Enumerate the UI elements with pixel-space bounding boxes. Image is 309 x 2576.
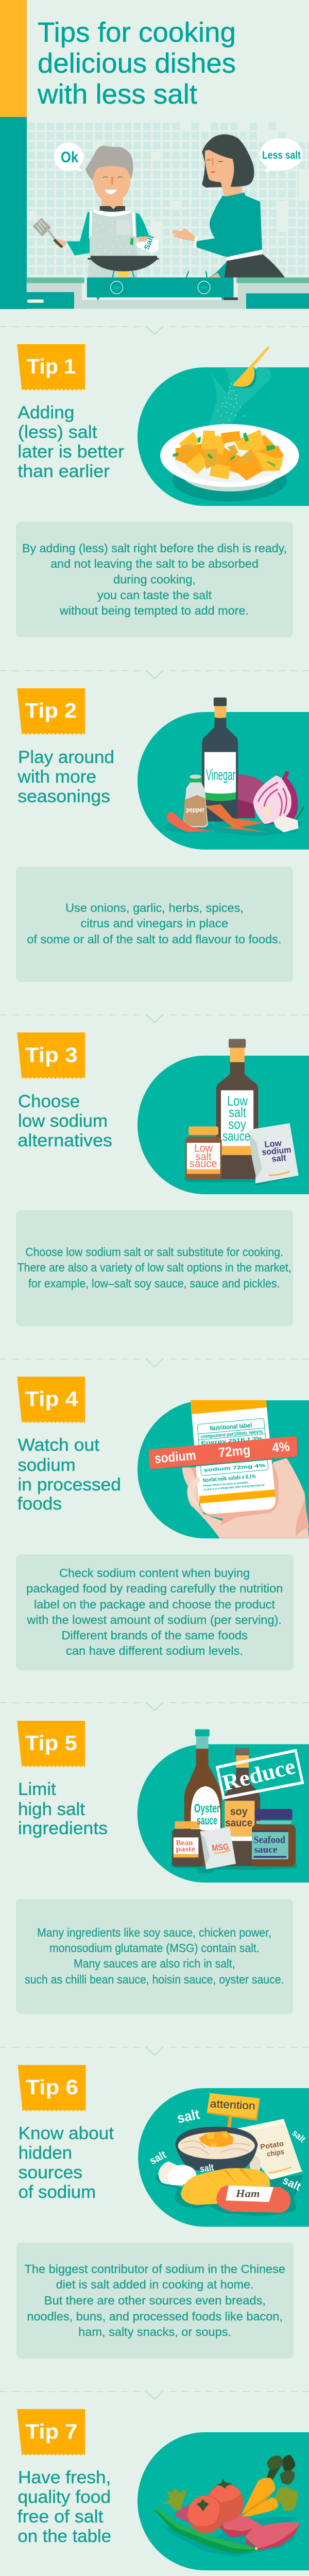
reduce stamp text: Reduce — [220, 1753, 298, 1796]
heading: low sodium — [18, 1111, 108, 1131]
speech bubble: Less salt: Less salt — [262, 149, 301, 161]
soy sauce label text: sauce — [222, 1128, 250, 1144]
heading: seasonings — [18, 787, 110, 806]
nutrition label text — [200, 1421, 266, 1492]
illustration: fresh vegetables — [153, 2455, 300, 2556]
teal pill background — [138, 2432, 309, 2570]
text panel: But there are other sources even breads, — [44, 2294, 266, 2307]
tip badge — [17, 1721, 85, 1767]
tip badge: Tip 4 — [25, 1387, 78, 1411]
bottle and jar label text: soy — [230, 1806, 248, 1818]
text panel: By adding (less) salt right before the dish is ready, — [22, 541, 287, 555]
text panel: packaged food by reading carefully the nutrition — [26, 1582, 283, 1595]
arrow: divider 5 — [0, 1702, 309, 1710]
heading: on the table — [18, 2527, 111, 2546]
jar label text: sauce — [190, 1158, 217, 1170]
tip badge: Tip 5 — [25, 1731, 77, 1755]
text panel — [16, 1210, 293, 1326]
heading: of sodium — [19, 2182, 96, 2202]
sign and food labels text — [148, 2098, 307, 2200]
heading: high salt — [18, 1800, 85, 1819]
text panel: ham, salty snacks, or soups. — [78, 2325, 231, 2338]
illustration: hand holding label — [182, 1400, 309, 1538]
bottle and jar label text — [176, 1802, 285, 1855]
sign and food labels text: salt — [176, 2106, 201, 2126]
pepper label text: pepper — [186, 806, 204, 814]
stove — [87, 278, 233, 301]
heading: Know about — [19, 2124, 114, 2143]
panel: tip 7 — [16, 2409, 309, 2576]
heading: Have fresh, — [18, 2468, 111, 2487]
heading: quality food — [18, 2487, 111, 2507]
speech bubble: Ok — [54, 143, 83, 171]
panel: tip 2 — [16, 688, 309, 982]
bag label text — [262, 1138, 291, 1164]
left colour bar — [0, 0, 27, 309]
bottle and jar label text: Bean — [176, 1839, 193, 1848]
heading: ingredients — [18, 1819, 108, 1838]
red sodium highlight bar — [149, 1436, 299, 1470]
heading: sodium — [18, 1455, 76, 1475]
red sodium highlight bar: 72mg — [218, 1442, 251, 1460]
nutrition label text: component per100ml. NRV% — [200, 1429, 263, 1440]
bag label text: salt — [271, 1153, 287, 1164]
text panel: Many sauces are also rich in salt, — [74, 1957, 235, 1970]
text panel: and not leaving the salt to be absorbed — [50, 557, 259, 570]
woman cook — [173, 134, 285, 278]
heading: sources — [19, 2163, 82, 2182]
tip badge: Tip 3 — [25, 1043, 78, 1067]
nutrition label text: Nutritional label — [210, 1421, 252, 1432]
bottle and jar label text: MSG — [211, 1842, 229, 1853]
illustration: low salt products — [184, 1039, 300, 1185]
man cook — [32, 145, 159, 277]
panel: hero header — [0, 0, 309, 309]
text panel: with the lowest amount of sodium (per serving). — [26, 1613, 282, 1626]
text panel: you can taste the salt — [97, 588, 212, 602]
teal pill background — [138, 712, 309, 850]
salt bottle label: Salt — [142, 234, 156, 251]
text panel: of some or all of the salt to add flavour to foods. — [27, 933, 281, 946]
bottle and jar label text: Seafood — [253, 1835, 285, 1846]
text panel: can have different sodium levels. — [66, 1644, 243, 1657]
tip badge: Tip 1 — [27, 354, 76, 378]
teal pill background — [138, 1056, 309, 1194]
red sodium highlight bar: 4% — [271, 1438, 290, 1455]
jar label text: Low — [194, 1143, 213, 1154]
nutrition label text: Energy 251KJ 3% — [201, 1436, 263, 1446]
sign and food labels text: salt — [290, 2128, 307, 2144]
text panel: There are also a variety of low salt options in the market, — [18, 1261, 291, 1274]
arrow: divider 3 — [0, 1014, 309, 1023]
sign and food labels text: salt — [281, 2174, 303, 2193]
text panel: without being tempted to add more. — [59, 604, 249, 617]
bottle and jar label text: Oyster — [194, 1802, 220, 1816]
heading — [17, 748, 114, 806]
heading: with more — [17, 767, 96, 787]
text panel: diet is salt added in cooking at home. — [56, 2278, 253, 2291]
text panel: for example, low–salt soy sauce, sauce and pickles. — [28, 1277, 280, 1290]
arrow: divider 2 — [0, 670, 309, 679]
bottle and jar label text: sauce — [197, 1814, 217, 1828]
heading: foods — [18, 1494, 62, 1514]
teal pill background — [138, 1744, 309, 1883]
bottle and jar label text: sauce — [254, 1844, 277, 1855]
arrow: divider 7 — [0, 2391, 309, 2399]
panel: tip 6 — [16, 2065, 309, 2359]
illustration: sauces and seasonings — [170, 1729, 302, 1873]
text panel: noodles, buns, and processed foods like bacon, — [27, 2310, 283, 2323]
heading: in processed — [18, 1475, 121, 1495]
bottle and jar label text: paste — [176, 1845, 195, 1854]
heading: free of salt — [18, 2507, 104, 2527]
soy sauce label text: soy — [228, 1116, 246, 1132]
text panel — [16, 867, 293, 982]
bag label text: Low — [264, 1138, 282, 1149]
jar label text — [190, 1143, 217, 1170]
panel: tip 5 — [16, 1721, 309, 2014]
heading — [18, 1435, 121, 1514]
arrow: divider 4 — [0, 1359, 309, 1367]
arrow: divider 6 — [0, 2047, 309, 2055]
nutrition label text: Please finish it as soon as possible — [203, 1481, 248, 1488]
text panel: Many ingredients like soy sauce, chicken power, — [37, 1926, 271, 1939]
text panel: label on the package and choose the product — [34, 1598, 276, 1611]
soy sauce label text: Low — [227, 1093, 248, 1109]
tip badge: Tip 6 — [26, 2075, 78, 2099]
teal pill background — [138, 1400, 309, 1538]
illustration: plate and spoon — [160, 346, 299, 502]
kitchen tile wall — [27, 122, 309, 277]
text panel: Choose low sodium salt or salt substitute for cooking. — [25, 1245, 283, 1259]
bottle and jar label text: sauce — [226, 1817, 252, 1829]
speech bubble: Ok: Ok — [61, 149, 78, 166]
heading: Limit — [18, 1780, 56, 1799]
teal pill background — [138, 2088, 309, 2227]
sign and food labels text: salt — [199, 2162, 214, 2174]
red sodium highlight bar: sodium — [154, 1447, 197, 1466]
text panel — [16, 1554, 294, 1670]
tip badge — [17, 1377, 85, 1423]
heading: Adding — [18, 403, 74, 422]
text panel — [16, 1899, 293, 2014]
text panel: such as chilli bean sauce, hoisin sauce, oyster sauce. — [25, 1973, 284, 1986]
panel: tip 4 — [16, 1377, 309, 1670]
text panel: Use onions, garlic, herbs, spices, — [65, 901, 244, 914]
heading: (less) salt — [18, 422, 97, 442]
tip badge — [17, 688, 85, 735]
text panel: during cooking, — [113, 573, 196, 586]
text panel: monosodium glutamate (MSG) contain salt. — [49, 1941, 260, 1955]
tip badge — [18, 2065, 85, 2111]
text panel: Check sodium content when buying — [59, 1566, 250, 1580]
vinegar label text: Vinegar — [206, 767, 235, 784]
heading: hidden — [19, 2143, 72, 2163]
text panel: The biggest contributor of sodium in the Chinese — [25, 2262, 285, 2276]
sign and food labels text: salt — [148, 2149, 168, 2167]
text panel — [16, 522, 293, 637]
counter and stove base — [27, 278, 309, 309]
illustration: vinegar and seasonings — [164, 698, 304, 837]
title: with less salt — [37, 79, 197, 110]
tip badge — [17, 1032, 85, 1079]
tip badge — [17, 344, 85, 391]
heading — [19, 2124, 114, 2202]
soy sauce label text — [222, 1093, 250, 1144]
nutrition label text: Nonfat milk solids ≥ 8.1% — [202, 1473, 256, 1484]
heading: later is better — [18, 442, 124, 462]
text panel — [16, 2243, 294, 2359]
sign and food labels text: chips — [266, 2147, 285, 2158]
title: Tips for cooking — [38, 17, 236, 48]
heading — [18, 1092, 112, 1150]
nutrition label text: carbohydrate 1mg 2% — [203, 1455, 266, 1466]
tip badge — [17, 2409, 85, 2455]
illustration: hidden sodium foods — [156, 2093, 303, 2216]
panel: tip 1 — [16, 344, 309, 637]
text panel: citrus and vinegars in place — [80, 917, 228, 930]
heading: than earlier — [18, 462, 110, 481]
arrow: divider 1 — [0, 326, 309, 334]
nutrition label text: sodium 72mg 4% — [203, 1463, 266, 1473]
heading — [18, 2468, 111, 2546]
heading — [18, 1780, 108, 1838]
title — [37, 17, 236, 110]
text panel: Different brands of the same foods — [61, 1629, 248, 1642]
heading — [18, 403, 124, 481]
nutrition label text: or put it in a refrigerator after being opening up. — [204, 1484, 265, 1492]
panel: tip 3 — [16, 1032, 309, 1326]
bag label text: sodium — [262, 1145, 291, 1157]
soy sauce label text: salt — [229, 1105, 246, 1120]
title: delicious dishes — [38, 48, 236, 79]
teal pill background — [138, 367, 309, 506]
sign and food labels text: Ham — [235, 2188, 260, 2200]
speech bubble: Less salt — [260, 138, 303, 172]
wok and flame — [88, 256, 159, 277]
tip badge: Tip 7 — [26, 2419, 77, 2443]
jar label text: salt — [196, 1151, 212, 1163]
heading: Play around — [18, 748, 114, 767]
tip badge: Tip 2 — [25, 699, 77, 722]
heading: Choose — [18, 1092, 80, 1111]
heading: Watch out — [18, 1435, 100, 1455]
heading: alternatives — [18, 1131, 112, 1150]
sign and food labels text: attention — [210, 2098, 255, 2112]
sign and food labels text: Potato — [260, 2139, 284, 2151]
